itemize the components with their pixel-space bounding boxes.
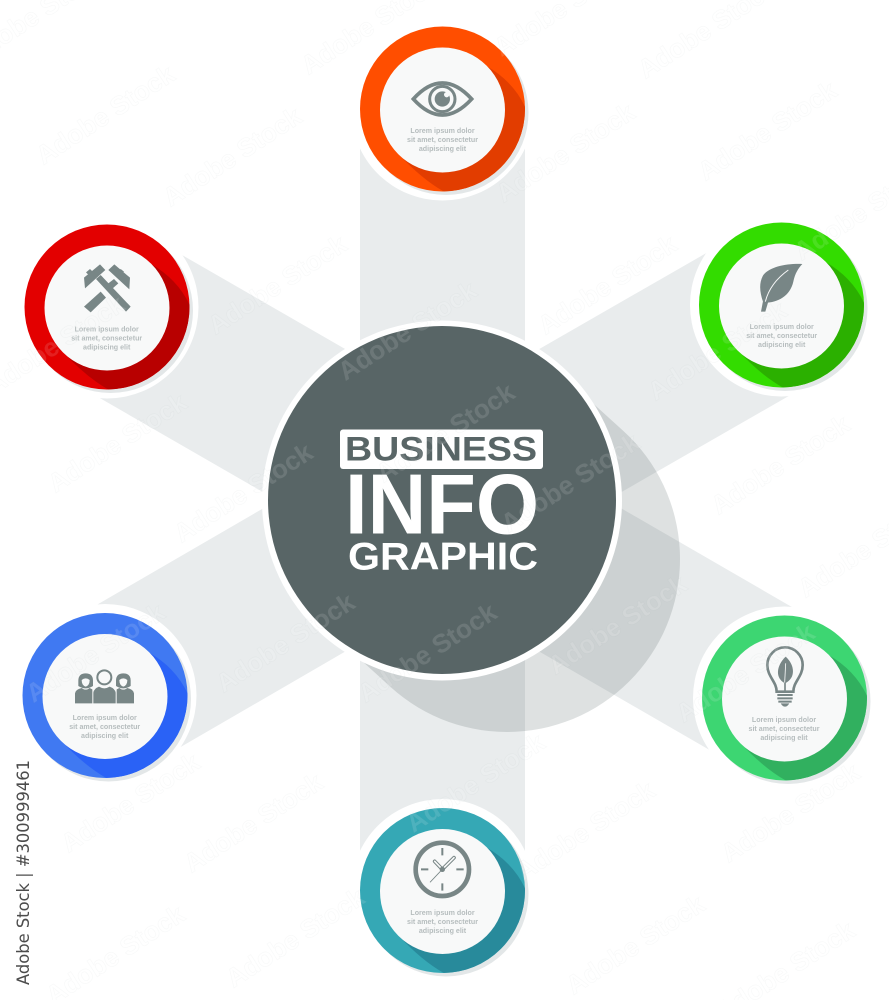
text block: Lorem ipsum dolor (750, 323, 814, 331)
text block: sit amet, consectetur (407, 918, 478, 926)
watermark pattern: Adobe Stock (532, 228, 682, 340)
watermark pattern: Adobe Stock (400, 726, 550, 838)
panel: green leaf (690, 214, 873, 396)
watermark pattern: Adobe Stock (560, 888, 710, 1000)
panel: red hammers (16, 216, 198, 398)
text block: Lorem ipsum dolor (410, 127, 475, 135)
icon: crossed hammers (84, 264, 131, 312)
six radial beams (105, 109, 784, 890)
watermark pattern: Adobe Stock (55, 746, 205, 858)
watermark pattern: Adobe Stock (510, 774, 660, 886)
hub title: info: INFO (345, 458, 539, 552)
text block: adipiscing elit (419, 927, 467, 935)
text block: Lorem ipsum dolor (75, 326, 139, 334)
stock id caption: Adobe Stock | #300999461 (14, 760, 34, 985)
text block: sit amet, consectetur (746, 332, 817, 340)
text block: sit amet, consectetur (69, 723, 140, 731)
watermark pattern: Adobe Stock (670, 616, 820, 728)
icon: leaf light bulb (767, 647, 803, 707)
watermark pattern: Adobe Stock (352, 596, 502, 708)
central long shadow (442, 500, 507, 559)
watermark pattern: Adobe Stock (20, 596, 170, 708)
watermark pattern: Adobe Stock (42, 386, 192, 498)
text block: adipiscing elit (419, 145, 467, 153)
watermark pattern: Adobe Stock (642, 294, 792, 406)
watermark pattern: Adobe Stock (30, 58, 180, 170)
central hub (262, 320, 622, 680)
panel: teal clock (360, 799, 528, 976)
panel: light green bulb (693, 606, 876, 790)
text block: sit amet, consectetur (71, 334, 142, 342)
watermark pattern: Adobe Stock (332, 274, 482, 386)
panel: orange eye (360, 26, 528, 200)
icon: eye (413, 83, 472, 115)
text block: adipiscing elit (81, 732, 129, 740)
text block: adipiscing elit (83, 344, 131, 352)
watermark pattern: Adobe Stock (692, 74, 842, 186)
text block: adipiscing elit (760, 734, 808, 742)
icon: clock (416, 843, 469, 896)
watermark pattern: Adobe Stock (202, 228, 352, 340)
watermark pattern: Adobe Stock (542, 568, 692, 680)
watermark pattern: Adobe Stock (157, 100, 307, 212)
text block: adipiscing elit (758, 341, 806, 349)
watermark pattern: Adobe Stock (168, 436, 318, 548)
watermark pattern: Adobe Stock (490, 96, 640, 208)
text block: Lorem ipsum dolor (410, 909, 475, 917)
watermark pattern: Adobe Stock (495, 426, 645, 538)
hub title: business label: BUSINESS (345, 430, 537, 468)
icon: three people (75, 670, 134, 703)
text block: Lorem ipsum dolor (73, 714, 137, 722)
watermark pattern: Adobe Stock (370, 376, 520, 488)
watermark pattern: Adobe Stock (220, 881, 370, 993)
watermark pattern: Adobe Stock (210, 586, 360, 698)
icon: leaf (760, 264, 802, 312)
watermark pattern: Adobe Stock (715, 756, 865, 868)
watermark pattern: Adobe Stock (705, 408, 855, 520)
panel: blue people (14, 604, 196, 787)
text block: Lorem ipsum dolor (752, 716, 816, 724)
hub title: graphic: GRAPHIC (348, 536, 538, 578)
text block: sit amet, consectetur (407, 136, 478, 144)
watermark pattern: Adobe Stock (178, 766, 328, 878)
text block: sit amet, consectetur (749, 725, 820, 733)
